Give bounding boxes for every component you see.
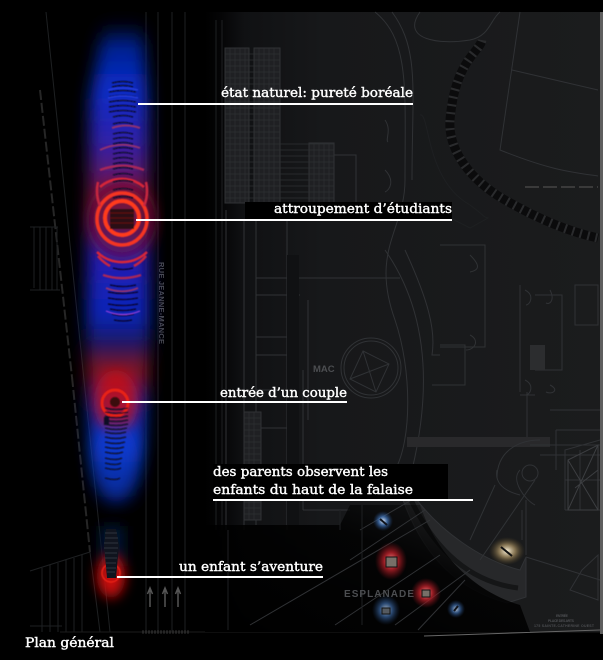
curved walls bbox=[375, 12, 600, 470]
building grids bbox=[216, 20, 400, 530]
hot spot: crowd of students (concentric red rings) bbox=[86, 126, 158, 291]
stripes: upper and mid column bbox=[106, 82, 140, 321]
lower right courtyard: PLACE DES ARTS bbox=[548, 619, 575, 623]
callout: des parents observent: des parents observent les bbox=[213, 465, 388, 480]
MAC circle bbox=[313, 338, 401, 398]
esplanade radial lines: ESPLANADE bbox=[344, 589, 414, 600]
hot spot: child venturing bbox=[97, 529, 125, 598]
hot spot: couple entering bbox=[102, 390, 128, 480]
top stadium curve bbox=[415, 12, 598, 238]
callout: entrée d'un couple: entrée d’un couple bbox=[220, 386, 347, 401]
callout: attroupement d'étudiants bbox=[136, 202, 452, 220]
callout: des parents observent: enfants du haut de la falaise bbox=[213, 483, 413, 498]
caption: plan général: Plan général bbox=[25, 636, 114, 651]
MAC circle: MAC bbox=[313, 364, 335, 375]
lower right courtyard: ENTRÉE bbox=[556, 613, 569, 618]
callout: un enfant s'aventure: un enfant s’aventure bbox=[179, 560, 323, 575]
lower right courtyard bbox=[403, 440, 600, 636]
arrows bbox=[148, 588, 180, 607]
dark esplanade ground bbox=[205, 505, 530, 632]
lower right courtyard: 175 SAINTE-CATHERINE OUEST bbox=[534, 624, 595, 628]
street label: RUE JEANNE-MANCE bbox=[157, 262, 166, 344]
callout: état naturel: état naturel: pureté boréale bbox=[221, 86, 413, 101]
esplanade radial lines bbox=[228, 480, 535, 630]
left site outline bbox=[30, 12, 110, 632]
callout: des parents observent bbox=[213, 464, 473, 500]
callout: attroupement d'étudiants: attroupement d’étudiants bbox=[274, 202, 452, 217]
site plan drawing bbox=[205, 12, 603, 636]
light column: blue and red glow bbox=[86, 20, 150, 566]
esplanade light markers bbox=[372, 511, 525, 625]
